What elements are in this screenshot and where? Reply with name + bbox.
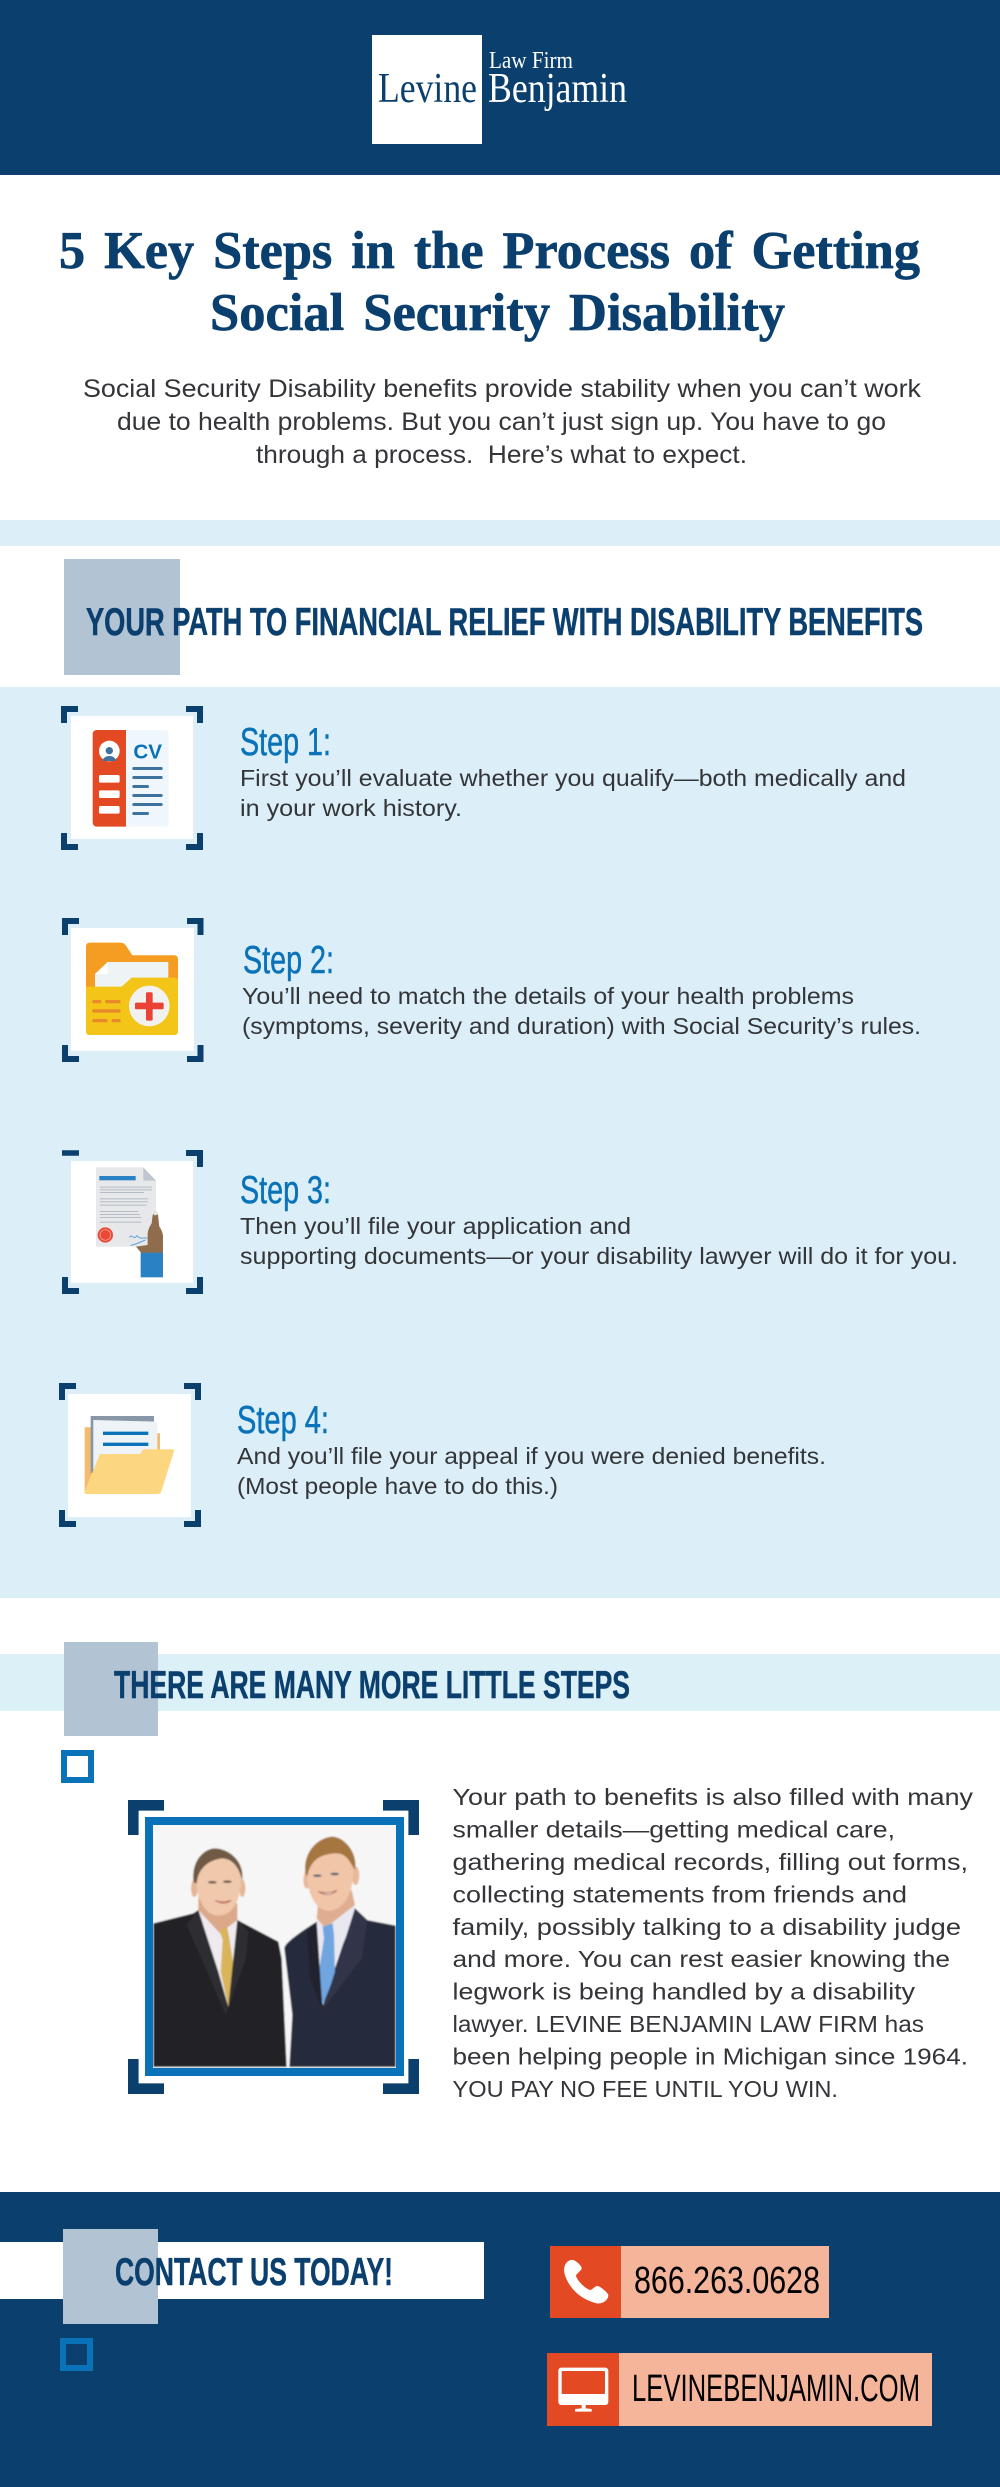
step 4 text: Step 4: xyxy=(237,1399,329,1442)
logo xyxy=(372,35,627,144)
header band with logo xyxy=(0,0,1000,175)
icon: open folder xyxy=(85,1416,174,1494)
paragraph: little steps: lawyer. LEVINE BENJAMIN LAW FIRM has xyxy=(452,2011,924,2037)
step 2 text: (symptoms, severity and duration) with Social Security’s rules. xyxy=(242,1013,921,1039)
heading: your path xyxy=(64,559,923,675)
icon: signed document xyxy=(96,1167,163,1277)
intro text xyxy=(83,375,922,469)
step 2 xyxy=(65,921,921,1059)
contact heading xyxy=(0,2229,484,2324)
paragraph: little steps: family, possibly talking to a disability judge xyxy=(452,1914,961,1940)
step 3 text: supporting documents—or your disability lawyer will do it for you. xyxy=(240,1243,958,1269)
step 1 xyxy=(64,709,906,847)
heading: many more little steps xyxy=(0,1642,1000,1736)
right man xyxy=(317,1890,355,1928)
website button xyxy=(547,2353,932,2426)
step 3 text: Step 3: xyxy=(240,1169,331,1212)
step 2 text: You’ll need to match the details of your health problems xyxy=(242,983,854,1009)
icon: monitor xyxy=(558,2368,608,2412)
paragraph: little steps: collecting statements from friends and xyxy=(452,1881,907,1907)
step 4 text xyxy=(237,1399,826,1499)
paragraph: little steps xyxy=(452,1784,974,2102)
footer panel xyxy=(0,2192,1000,2487)
paragraph: little steps: been helping people in Michigan since 1964. xyxy=(452,2044,968,2070)
intro text: Social Security Disability benefits provide stability when you can’t work xyxy=(83,375,922,403)
step 2 text: Step 2: xyxy=(243,939,334,982)
panel: steps xyxy=(0,687,1000,2487)
intro text: through a process. Here’s what to expect. xyxy=(256,441,747,469)
contact heading: CONTACT US TODAY! xyxy=(115,2251,393,2294)
step 4 text: (Most people have to do this.) xyxy=(237,1473,558,1499)
icon: medical folder xyxy=(86,943,178,1035)
step 1 text: in your work history. xyxy=(240,795,462,821)
step 1 text: Step 1: xyxy=(240,721,331,764)
paragraph: little steps: YOU PAY NO FEE UNTIL YOU WIN. xyxy=(452,2076,838,2102)
step 4 text: And you’ll file your appeal if you were denied benefits. xyxy=(237,1443,826,1469)
paragraph: little steps: and more. You can rest easier knowing the xyxy=(452,1946,950,1972)
paragraph: little steps: smaller details—getting medical care, xyxy=(452,1816,895,1842)
light band divider xyxy=(0,520,1000,546)
portrait illustration xyxy=(153,1836,396,2068)
paragraph: little steps: gathering medical records, filling out forms, xyxy=(452,1849,968,1875)
small blue square outline xyxy=(63,2341,90,2368)
heading: many more little steps: THERE ARE MANY MORE LITTLE STEPS xyxy=(114,1664,630,1707)
title: Social Security Disability xyxy=(210,284,785,342)
photo with frame xyxy=(133,1805,414,2089)
intro text: due to health problems. But you can’t just sign up. You have to go xyxy=(117,408,886,436)
title: 5 Key Steps in the Process of Getting xyxy=(59,222,920,280)
step 3 xyxy=(62,1153,958,1291)
left man xyxy=(198,1897,237,1933)
logo: Law Firm xyxy=(489,48,573,74)
step 3 text: Then you’ll file your application and xyxy=(240,1213,631,1239)
title xyxy=(59,222,920,342)
small blue square xyxy=(64,1753,91,1780)
icon: CV document: CV xyxy=(133,740,162,763)
paragraph: little steps: Your path to benefits is also filled with many xyxy=(452,1784,974,1810)
step 4 xyxy=(62,1386,826,1524)
icon: CV document xyxy=(93,730,169,827)
step 3 text xyxy=(240,1169,958,1269)
logo: Benjamin xyxy=(488,66,627,112)
paragraph: little steps: legwork is being handled by a disability xyxy=(452,1979,916,2005)
icon: phone xyxy=(564,2260,608,2303)
logo: Levine xyxy=(378,66,477,112)
step 2 text xyxy=(242,939,921,1039)
step 1 text: First you’ll evaluate whether you qualify—both medically and xyxy=(240,765,906,791)
phone button: 866.263.0628 xyxy=(634,2260,820,2302)
step 1 text xyxy=(240,721,906,821)
phone button xyxy=(550,2246,829,2318)
